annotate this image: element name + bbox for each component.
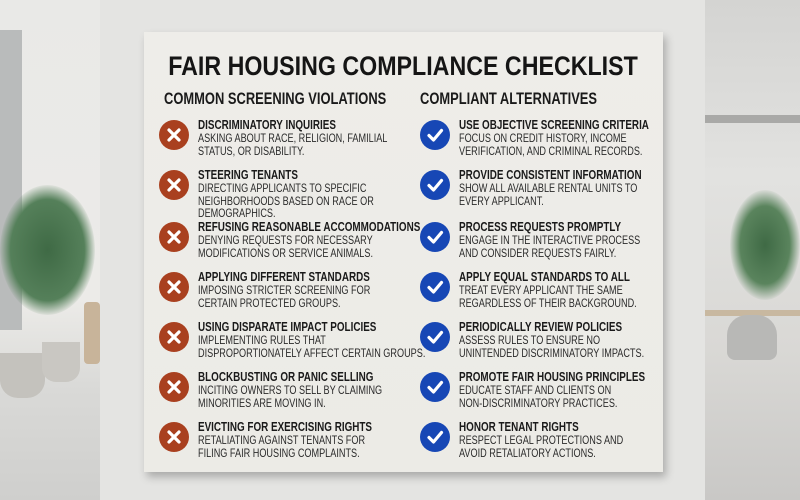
- pot: [0, 353, 45, 398]
- violation 7: FILING FAIR HOUSING COMPLAINTS.: [198, 446, 360, 460]
- alternative 6: NON-DISCRIMINATORY PRACTICES.: [459, 396, 617, 410]
- violation 5: USING DISPARATE IMPACT POLICIES: [198, 319, 376, 334]
- violation 3: REFUSING REASONABLE ACCOMMODATIONS: [198, 219, 420, 234]
- violation 5: [159, 319, 425, 360]
- icon: x: [159, 170, 189, 200]
- alternative 5: [420, 319, 644, 360]
- violation 3: DENYING REQUESTS FOR NECESSARY: [198, 233, 373, 247]
- violation 6: INCITING OWNERS TO SELL BY CLAIMING: [198, 383, 382, 397]
- icon: x: [159, 372, 189, 402]
- violation 3: [159, 219, 420, 260]
- alternative 2: EVERY APPLICANT.: [459, 194, 544, 208]
- heading: violations: COMMON SCREENING VIOLATIONS: [164, 89, 386, 108]
- alternative 7: AVOID RETALIATORY ACTIONS.: [459, 446, 596, 460]
- violation 2: STEERING TENANTS: [198, 167, 298, 182]
- violation 4: IMPOSING STRICTER SCREENING FOR: [198, 283, 370, 297]
- violation 7: EVICTING FOR EXERCISING RIGHTS: [198, 419, 372, 434]
- background: left office scene: [0, 0, 100, 500]
- alternative 1: VERIFICATION, AND CRIMINAL RECORDS.: [459, 144, 642, 158]
- violation 5: IMPLEMENTING RULES THAT: [198, 333, 326, 347]
- alternative 5: UNINTENDED DISCRIMINATORY IMPACTS.: [459, 346, 644, 360]
- title: FAIR HOUSING COMPLIANCE CHECKLIST: [169, 51, 638, 81]
- violation 2: NEIGHBORHOODS BASED ON RACE OR: [198, 194, 374, 208]
- alternative 4: REGARDLESS OF THEIR BACKGROUND.: [459, 296, 637, 310]
- icon: check: [420, 322, 450, 352]
- alternative 7: HONOR TENANT RIGHTS: [459, 419, 579, 434]
- icon: x: [159, 120, 189, 150]
- icon: x: [159, 422, 189, 452]
- violation 3: MODIFICATIONS OR SERVICE ANIMALS.: [198, 246, 373, 260]
- violation 4: CERTAIN PROTECTED GROUPS.: [198, 296, 341, 310]
- window frame: [0, 30, 22, 330]
- icon: check: [420, 422, 450, 452]
- violation 4: [159, 269, 370, 310]
- alternative 7: [420, 419, 623, 460]
- icon: check: [420, 372, 450, 402]
- violation 6: MINORITIES ARE MOVING IN.: [198, 396, 326, 410]
- alternative 4: APPLY EQUAL STANDARDS TO ALL: [459, 269, 630, 284]
- alternative 7: RESPECT LEGAL PROTECTIONS AND: [459, 433, 623, 447]
- alternative 3: PROCESS REQUESTS PROMPTLY: [459, 219, 621, 234]
- violation 2: [159, 167, 374, 220]
- alternative 5: PERIODICALLY REVIEW POLICIES: [459, 319, 622, 334]
- checklist board: [144, 32, 663, 472]
- violation 7: [159, 419, 372, 460]
- alternative 3: ENGAGE IN THE INTERACTIVE PROCESS: [459, 233, 640, 247]
- chair: [727, 315, 777, 360]
- chair: [84, 302, 100, 364]
- alternative 1: [420, 117, 649, 158]
- violation 6: [159, 369, 382, 410]
- icon: x: [159, 272, 189, 302]
- violation 2: DEMOGRAPHICS.: [198, 206, 276, 220]
- plant: [0, 185, 95, 315]
- violation 1: ASKING ABOUT RACE, RELIGION, FAMILIAL: [198, 131, 387, 145]
- icon: check: [420, 272, 450, 302]
- icon: check: [420, 222, 450, 252]
- icon: check: [420, 170, 450, 200]
- alternative 6: PROMOTE FAIR HOUSING PRINCIPLES: [459, 369, 645, 384]
- plant: [730, 190, 800, 300]
- alternative 3: AND CONSIDER REQUESTS FAIRLY.: [459, 246, 616, 260]
- alternative 1: USE OBJECTIVE SCREENING CRITERIA: [459, 117, 649, 132]
- desk: [705, 310, 800, 316]
- icon: check: [420, 120, 450, 150]
- alternative 2: PROVIDE CONSISTENT INFORMATION: [459, 167, 642, 182]
- alternative 4: TREAT EVERY APPLICANT THE SAME: [459, 283, 623, 297]
- alternative 6: EDUCATE STAFF AND CLIENTS ON: [459, 383, 611, 397]
- alternative 3: [420, 219, 640, 260]
- violation 6: BLOCKBUSTING OR PANIC SELLING: [198, 369, 373, 384]
- heading: alternatives: COMPLIANT ALTERNATIVES: [420, 89, 597, 108]
- violation 4: APPLYING DIFFERENT STANDARDS: [198, 269, 370, 284]
- alternative 1: FOCUS ON CREDIT HISTORY, INCOME: [459, 131, 627, 145]
- background: right office scene: [705, 0, 800, 500]
- alternative 2: [420, 167, 642, 208]
- violation 5: DISPROPORTIONATELY AFFECT CERTAIN GROUPS.: [198, 346, 425, 360]
- violation 7: RETALIATING AGAINST TENANTS FOR: [198, 433, 365, 447]
- violation 1: [159, 117, 387, 158]
- violation 2: DIRECTING APPLICANTS TO SPECIFIC: [198, 181, 366, 195]
- violation 1: DISCRIMINATORY INQUIRIES: [198, 117, 336, 132]
- icon: x: [159, 222, 189, 252]
- icon: x: [159, 322, 189, 352]
- alternative 6: [420, 369, 645, 410]
- alternative 2: SHOW ALL AVAILABLE RENTAL UNITS TO: [459, 181, 637, 195]
- violation 1: STATUS, OR DISABILITY.: [198, 144, 304, 158]
- alternative 4: [420, 269, 637, 310]
- alternative 5: ASSESS RULES TO ENSURE NO: [459, 333, 600, 347]
